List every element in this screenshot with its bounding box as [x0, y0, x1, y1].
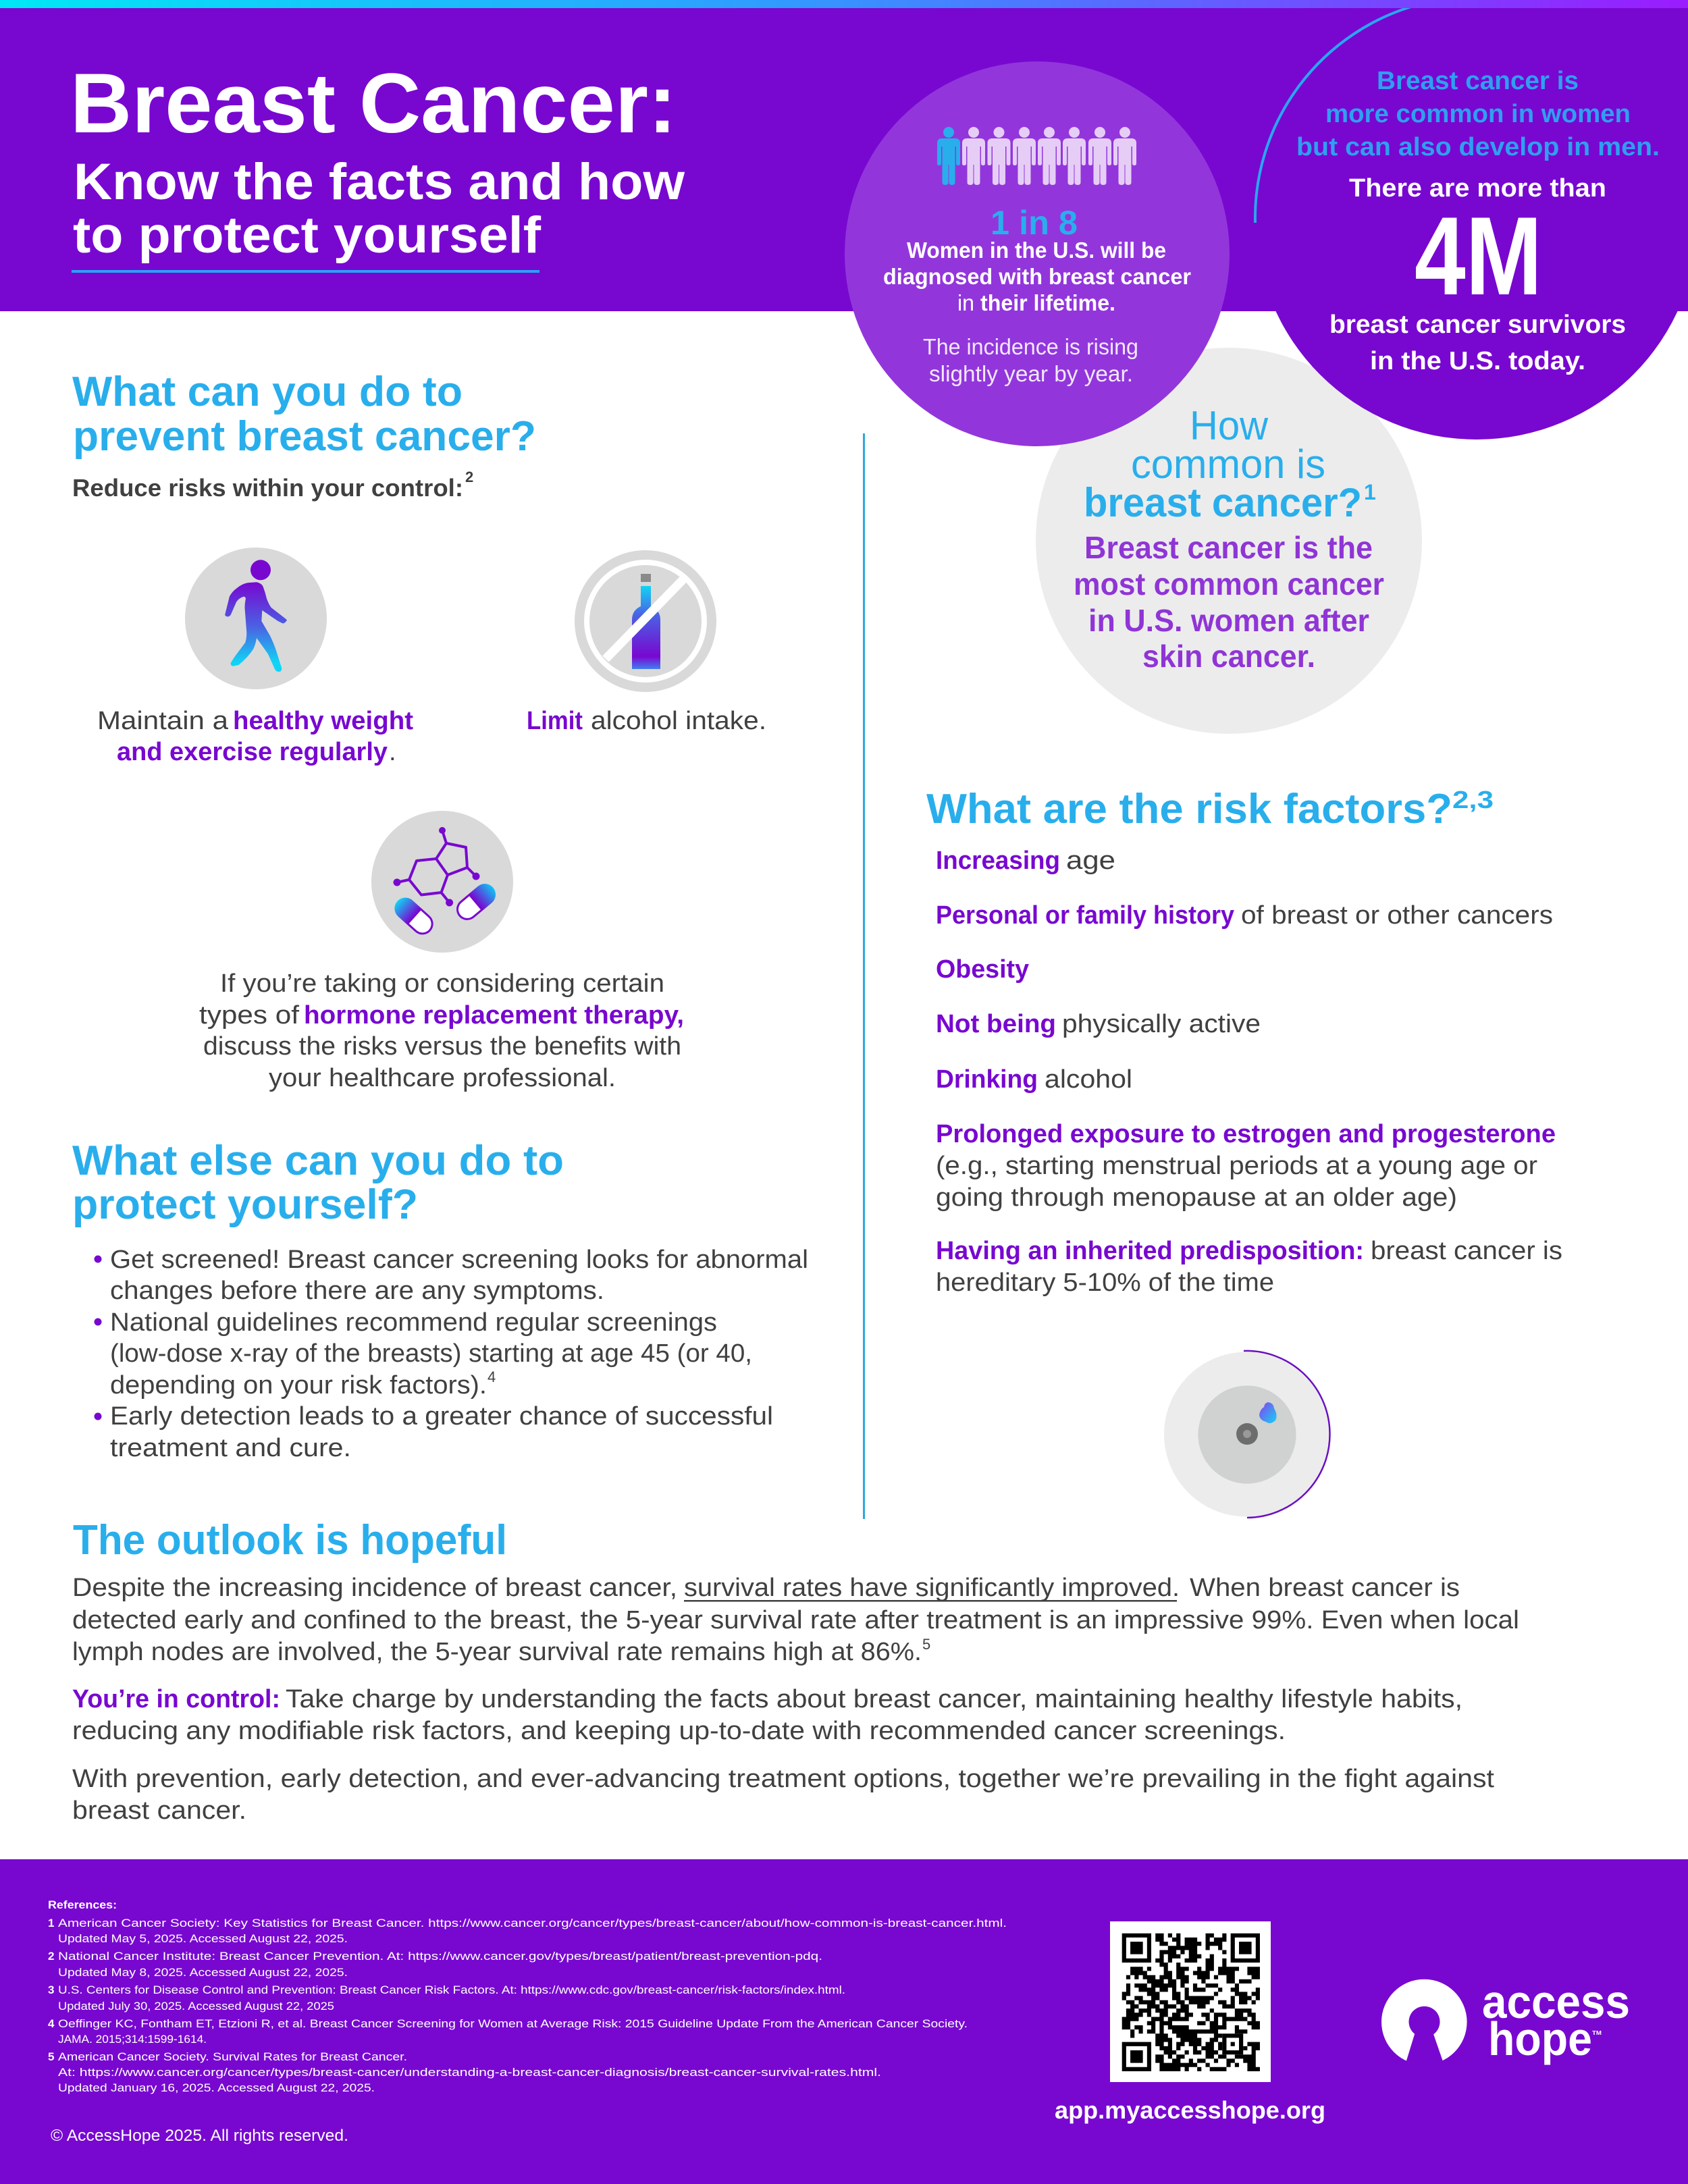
subtitle: Know the facts and how: [74, 153, 685, 211]
text: limit alcohol: [527, 707, 766, 735]
references: 5: [48, 2050, 54, 2063]
website url: app.myaccesshope.org: [1055, 2096, 1325, 2124]
more common in women statement: but can also develop in men.: [1296, 133, 1660, 161]
references: Updated May 8, 2025. Accessed August 22, 2025.: [58, 1966, 348, 1979]
how common heading: common is: [1131, 442, 1325, 487]
icon: breast cross-section with tumor: [1164, 1351, 1330, 1518]
text: hormone replacement therapy: hormone replacement therapy,: [304, 1001, 684, 1030]
list: risk factors: [936, 847, 1562, 1297]
list: risk factors: of breast or other cancers: [1241, 901, 1553, 930]
heading: prevent breast cancer: What can you do to: [72, 369, 463, 415]
icon: no alcohol: [575, 550, 716, 692]
list: risk factors: physically active: [1062, 1010, 1261, 1038]
bullet list: screening: [95, 1246, 808, 1462]
bullet list: screening: treatment and cure.: [110, 1434, 351, 1462]
heading: the outlook is hopeful: The outlook is hopeful: [73, 1517, 507, 1564]
text: closing paragraph: [72, 1765, 1494, 1825]
subtitle: to protect yourself: [73, 207, 542, 264]
panel: how common is breast cancer: [1036, 348, 1422, 734]
references: American Cancer Society: Key Statistics for Breast Cancer. https://www.cancer.org/cancer/types/breast-cancer/about/how-common-is-breast-cancer.html.: [58, 1917, 1007, 1929]
title: Breast Cancer:: [70, 57, 677, 151]
title: [70, 57, 685, 273]
pill left: [390, 893, 438, 939]
stat: 4M: 4M: [1415, 194, 1542, 318]
list: risk factors: Drinking: [936, 1065, 1038, 1094]
references: At: https://www.cancer.org/cancer/types/breast-cancer/understanding-a-breast-cancer-diagnosis/breast-cancer-survival-rates.html.: [58, 2066, 881, 2079]
survivors lead-in: There are more than: [1349, 174, 1606, 203]
logo wordmark: hope: [1488, 2013, 1592, 2065]
references: Updated July 30, 2025. Accessed August 22, 2025: [58, 2000, 334, 2013]
subheading: reduce risks: Reduce risks within your control:: [72, 474, 463, 502]
text: healthy weight: .: [389, 738, 396, 766]
references: Updated January 16, 2025. Accessed August 22, 2025.: [58, 2081, 375, 2094]
title underline: [72, 270, 539, 273]
text: survival rates paragraph: Despite the increasing incidence of breast cancer,: [72, 1574, 677, 1602]
text: healthy weight: healthy weight: [233, 707, 413, 735]
references: Updated May 5, 2025. Accessed August 22, 2025.: [58, 1932, 348, 1945]
list: risk factors: Prolonged exposure to estrogen and progesterone: [936, 1120, 1556, 1148]
references: American Cancer Society. Survival Rates for Breast Cancer.: [58, 2050, 407, 2063]
column divider: [863, 433, 865, 1519]
how common heading: [1084, 403, 1376, 525]
bullet list: screening: Early detection leads to a greater chance of successful: [110, 1402, 773, 1431]
stat description: their lifetime.: [980, 290, 1115, 315]
heading: risk factors: What are the risk factors?: [926, 786, 1452, 832]
footer band: [0, 1859, 1688, 2184]
survivors description: [1329, 311, 1626, 375]
references: U.S. Centers for Disease Control and Prevention: Breast Cancer Risk Factors. At: https://www.cdc.gov/breast-cancer/risk-factors/index.html.: [58, 1983, 845, 1996]
logo keyhole mark: [1381, 1979, 1467, 2067]
list: risk factors: hereditary 5-10% of the time: [936, 1269, 1274, 1297]
bullet list: screening: changes before there are any symptoms.: [110, 1277, 604, 1305]
survivors description: in the U.S. today.: [1370, 347, 1585, 375]
how common statement: Breast cancer is the: [1084, 530, 1373, 565]
list: risk factors: Increasing: [936, 847, 1060, 875]
text: survival rates paragraph: 5: [922, 1636, 930, 1653]
list: risk factors: Personal or family history: [936, 901, 1234, 930]
bullet list: screening: Get screened! Breast cancer screening looks for abnormal: [110, 1246, 808, 1274]
subheading: reduce risks: 2: [465, 469, 473, 485]
panel: survivors stat circle: [1255, 0, 1688, 440]
references: Oeffinger KC, Fontham ET, Etzioni R, et al. Breast Cancer Screening for Women at Average Risk: 2015 Guideline Update From the American Cancer Society.: [58, 2017, 968, 2030]
header band: [0, 0, 1688, 311]
text: survival rates paragraph: detected early and confined to the breast, the 5-year survival rate after treatment is an impressive 99%. Even when local: [72, 1606, 1519, 1634]
references: JAMA. 2015;314:1599-1614.: [58, 2033, 207, 2046]
icon: walking person: [185, 548, 327, 689]
more common in women statement: [1296, 67, 1660, 161]
list: risk factors: Having an inherited predisposition:: [936, 1237, 1364, 1265]
text: limit alcohol: Limit: [527, 707, 583, 735]
icon: hormone molecule and pills: [371, 811, 513, 953]
bullet list: screening: (low-dose x-ray of the breasts) starting at age 45 (or 40,: [110, 1339, 752, 1368]
text: survival rates paragraph: lymph nodes are involved, the 5-year survival rate remains high at 86%.: [72, 1638, 922, 1666]
text: hormone replacement therapy: [199, 969, 684, 1092]
incidence note: [923, 334, 1138, 386]
stat: 1 in 8: 1 in 8: [991, 204, 1078, 242]
text: limit alcohol: alcohol intake.: [591, 707, 766, 735]
list: risk factors: breast cancer is: [1371, 1237, 1562, 1265]
survivors description: breast cancer survivors: [1329, 311, 1626, 339]
copyright: © AccessHope 2025. All rights reserved.: [51, 2127, 348, 2145]
bullet list: screening: depending on your risk factors).: [110, 1371, 487, 1400]
text: you're in control paragraph: reducing any modifiable risk factors, and keeping up-to-date with recommended cancer screenings.: [72, 1717, 1286, 1745]
heading: risk factors: 2,3: [1452, 786, 1494, 814]
logo wordmark: access: [1482, 1975, 1630, 2028]
references: 1: [48, 1917, 54, 1929]
text: healthy weight: and exercise regularly: [117, 738, 388, 766]
panel: 1 in 8 stat circle: [845, 61, 1230, 446]
references: 4: [48, 2017, 55, 2030]
references: 3: [48, 1983, 54, 1996]
molecule: [393, 827, 479, 906]
icon: row of eight people: [937, 127, 1136, 185]
list: risk factors: (e.g., starting menstrual periods at a young age or: [936, 1152, 1537, 1180]
text: healthy weight: Maintain a: [97, 707, 229, 735]
incidence note: slightly year by year.: [929, 361, 1133, 386]
list: risk factors: going through menopause at an older age): [936, 1183, 1457, 1212]
how common statement: skin cancer.: [1142, 639, 1315, 674]
text: you're in control paragraph: [72, 1685, 1462, 1745]
references: References:: [48, 1898, 117, 1911]
text: survival rates paragraph: When breast cancer is: [1190, 1574, 1460, 1602]
how common heading: How: [1190, 403, 1269, 448]
bullet list: screening: 4: [487, 1368, 496, 1385]
heading: protect yourself: [72, 1138, 564, 1228]
text: closing paragraph: breast cancer.: [72, 1796, 246, 1825]
text: you're in control paragraph: Take charge by understanding the facts about breast cancer, maintaining healthy lifestyle habits,: [286, 1685, 1462, 1713]
list: risk factors: age: [1066, 847, 1115, 875]
how common heading: breast cancer?: [1084, 480, 1362, 525]
top gradient bar: [0, 0, 1688, 8]
list: risk factors: Obesity: [936, 955, 1029, 984]
cyan arc accent: [1255, 5, 1418, 223]
text: survival rates paragraph: [72, 1574, 1519, 1666]
heading: protect yourself: protect yourself?: [72, 1181, 418, 1228]
stat description: diagnosed with breast cancer: [883, 264, 1191, 289]
logo wordmark: TM: [1592, 2030, 1602, 2036]
text: hormone replacement therapy: types of: [199, 1001, 299, 1030]
references: [48, 1898, 1007, 2094]
QR code: [1110, 1921, 1271, 2082]
more common in women statement: Breast cancer is: [1377, 67, 1579, 95]
text: hormone replacement therapy: discuss the risks versus the benefits with: [203, 1032, 681, 1061]
text: hormone replacement therapy: If you’re taking or considering certain: [220, 969, 664, 998]
incidence note: The incidence is rising: [923, 334, 1138, 359]
list: risk factors: Not being: [936, 1010, 1056, 1038]
how common statement: in U.S. women after: [1088, 603, 1369, 638]
stat description: Women in the U.S. will be: [907, 238, 1166, 263]
text: healthy weight: [97, 707, 413, 766]
how common statement: [1074, 530, 1384, 674]
references: National Cancer Institute: Breast Cancer Prevention. At: https://www.cancer.gov/types/breast/patient/breast-prevention-pdq.: [58, 1950, 822, 1963]
stat description: in: [957, 290, 974, 315]
text: hormone replacement therapy: your healthcare professional.: [269, 1064, 616, 1092]
bullet list: screening: National guidelines recommend regular screenings: [110, 1308, 717, 1337]
text: survival rates paragraph: survival rates have significantly improved.: [684, 1574, 1180, 1602]
how common heading: 1: [1364, 480, 1376, 504]
subtitle: [73, 153, 685, 264]
heading: prevent breast cancer: [72, 369, 536, 460]
how common statement: most common cancer: [1074, 566, 1384, 602]
heading: protect yourself: What else can you do to: [72, 1138, 564, 1184]
text: closing paragraph: With prevention, early detection, and ever-advancing treatment options, together we’re prevailing in the fight against: [72, 1765, 1494, 1793]
logo: access hope: [1381, 1975, 1630, 2067]
heading: prevent breast cancer: prevent breast cancer?: [73, 413, 536, 460]
more common in women statement: more common in women: [1325, 100, 1631, 128]
pill right: [452, 880, 500, 924]
logo wordmark: [1482, 1975, 1630, 2065]
stat description: [883, 238, 1191, 315]
text: you're in control paragraph: You’re in control:: [72, 1685, 280, 1713]
references: 2: [48, 1950, 54, 1963]
list: risk factors: alcohol: [1045, 1065, 1132, 1094]
